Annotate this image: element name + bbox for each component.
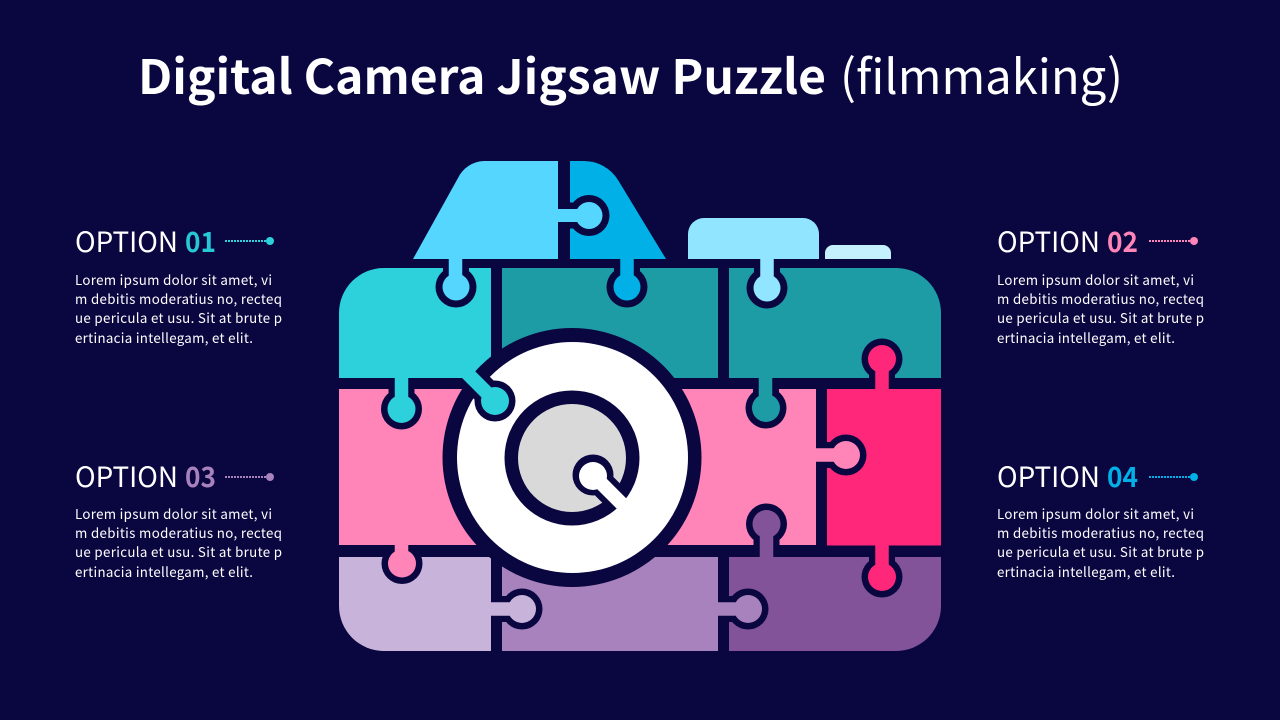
option 04 text block: Lorem ipsum dolor sit amet, vi xyxy=(997,504,1194,523)
option 03 text block: OPTION xyxy=(75,456,178,496)
option 03 text block xyxy=(75,456,282,581)
knob: viewfinder left to body xyxy=(436,258,476,308)
lens xyxy=(442,328,702,587)
title: (filmmaking) xyxy=(840,39,1123,108)
option 02 text block: OPTION xyxy=(997,221,1100,261)
piece: middle left pink xyxy=(339,389,509,545)
option 01 text block: ertinacia intellegam, et elit. xyxy=(75,328,253,347)
option 02 text block: Lorem ipsum dolor sit amet, vi xyxy=(997,270,1194,289)
option 04 text block xyxy=(997,456,1204,581)
knob: dark teal to pink right xyxy=(746,377,786,428)
option 01 text block: Lorem ipsum dolor sit amet, vi xyxy=(75,270,272,289)
option 02 text block: 02 xyxy=(1107,221,1138,261)
knob: shutter button to body xyxy=(746,258,788,308)
knob: pink left down to lilac xyxy=(381,541,423,584)
option 01 text block: OPTION xyxy=(75,221,178,261)
piece: shutter button large xyxy=(688,218,819,259)
option 02 text block: ue pericula et usu. Sit at brute p xyxy=(997,308,1204,327)
camera jigsaw illustration xyxy=(339,161,941,651)
knob: hot pink up to dark teal xyxy=(862,338,902,390)
option 01 text block: 01 xyxy=(185,221,216,261)
knob: teal to pink left xyxy=(381,377,422,430)
option 04 text block: ue pericula et usu. Sit at brute p xyxy=(997,542,1204,561)
piece: bottom right dark purple xyxy=(729,557,941,651)
knob: pink right to hot pink xyxy=(815,434,866,476)
piece: viewfinder right xyxy=(570,161,666,259)
piece: top right body xyxy=(729,268,941,378)
option 03 text block: ertinacia intellegam, et elit. xyxy=(75,562,253,581)
title: Digital Camera Jigsaw Puzzle xyxy=(138,39,826,108)
piece: bottom left lilac xyxy=(339,557,491,651)
knob: lilac to purple xyxy=(490,588,542,630)
piece: middle right hot pink xyxy=(827,389,941,546)
option 03 text block: Lorem ipsum dolor sit amet, vi xyxy=(75,504,272,523)
option 01 text block xyxy=(75,221,282,347)
knob: teal diagonal into lens xyxy=(462,368,516,422)
piece: viewfinder left xyxy=(413,161,558,259)
piece: bottom middle purple xyxy=(502,557,718,651)
option 04 text block: OPTION xyxy=(997,456,1100,496)
option 04 text block: 04 xyxy=(1107,456,1138,496)
option 01 text block: m debitis moderatius no, recteq xyxy=(75,289,282,308)
option 02 text block: m debitis moderatius no, recteq xyxy=(997,289,1204,308)
knob: viewfinder left to right xyxy=(557,195,610,236)
option 02 text block: ertinacia intellegam, et elit. xyxy=(997,328,1175,347)
knob: hot pink down to dark purple xyxy=(862,545,902,598)
knob: dark purple up to pink xyxy=(746,504,787,558)
piece: middle right pink xyxy=(640,389,816,545)
title xyxy=(138,39,1123,108)
option 03 text block: 03 xyxy=(185,456,216,496)
option 01 text block: ue pericula et usu. Sit at brute p xyxy=(75,308,282,327)
knob: viewfinder right to body xyxy=(606,258,648,308)
option 03 text block: m debitis moderatius no, recteq xyxy=(75,523,282,542)
option 02 text block xyxy=(997,221,1204,347)
knob: purple to dark purple xyxy=(717,588,768,630)
piece: shutter button small xyxy=(825,245,891,259)
option 04 text block: m debitis moderatius no, recteq xyxy=(997,523,1204,542)
option 03 text block: ue pericula et usu. Sit at brute p xyxy=(75,542,282,561)
piece: top left body xyxy=(339,268,491,378)
piece: top middle body xyxy=(502,268,718,378)
option 04 text block: ertinacia intellegam, et elit. xyxy=(997,562,1175,581)
